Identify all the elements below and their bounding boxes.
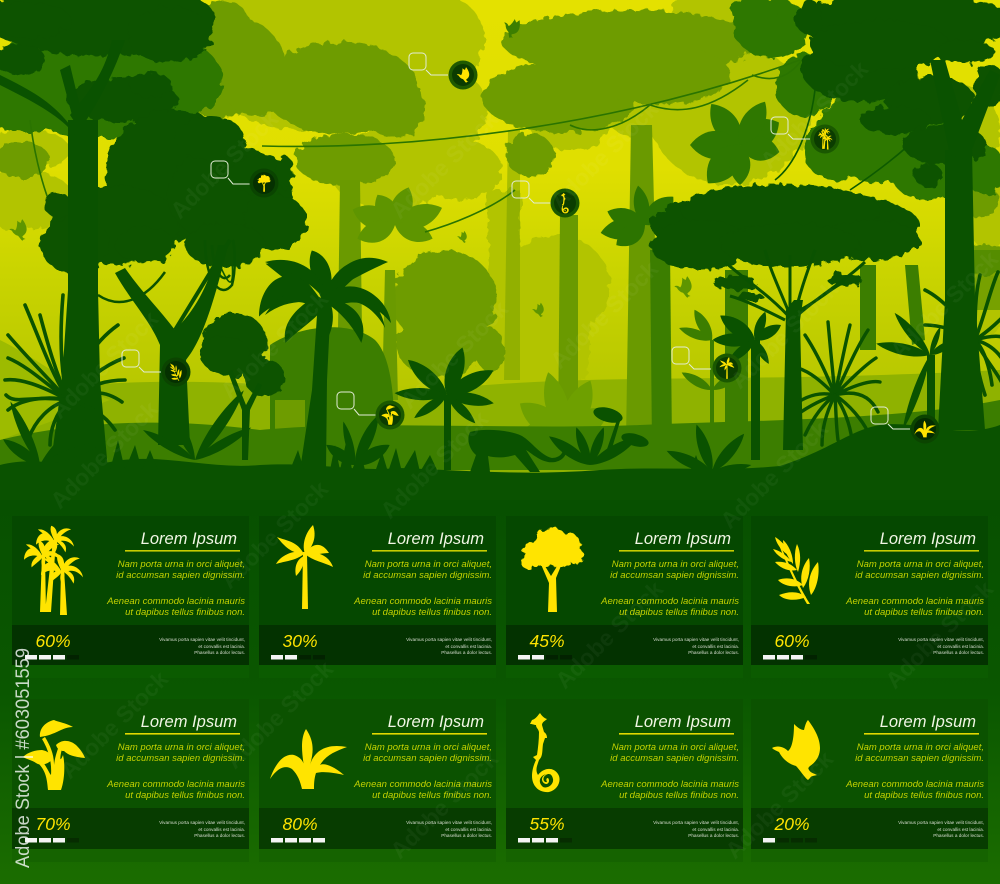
panel: vine 55%: id accumsan sapien dignissim.: [610, 753, 739, 764]
panel: vine 55%: Phasellus a dolor lectus.: [688, 833, 739, 838]
panel: fern 80%: Aenean commodo lacinia mauris: [353, 779, 492, 790]
panel: bird 20%: 20%: [773, 814, 810, 834]
leaf plant behind palm: [678, 307, 745, 440]
panel: fern 80%: 80%: [282, 814, 318, 834]
panel: bird 20%: Phasellus a dolor lectus.: [933, 833, 984, 838]
panel: vine 55%: Aenean commodo lacinia mauris: [600, 779, 739, 790]
panel: frond 60%: Phasellus a dolor lectus.: [933, 650, 984, 655]
panel: fern 80%: et convallis est lacinia.: [445, 827, 492, 832]
callout: mushroom plant: [337, 392, 404, 430]
watermark pattern: Adobe Stock: [215, 476, 333, 594]
watermark pattern: Adobe Stock: [720, 746, 838, 864]
panel: vine 55%: [506, 699, 743, 862]
watermark pattern: Adobe Stock: [880, 576, 998, 694]
panel: palms 60%: [12, 516, 249, 678]
left ground leaves: [0, 400, 107, 470]
panel: vine 55%: ut dapibus tellus finibus non.: [619, 790, 739, 801]
watermark pattern: Adobe Stock: [385, 746, 503, 864]
panel: plant 70%: et convallis est lacinia.: [198, 827, 245, 832]
watermark pattern: Adobe Stock: [385, 106, 503, 224]
small tree: [200, 313, 285, 460]
panel: plant 70%: Aenean commodo lacinia mauris: [106, 779, 245, 790]
panel: frond 60%: Aenean commodo lacinia mauris: [845, 596, 984, 607]
front tree right: [795, 0, 1000, 430]
small palm right: [712, 309, 784, 460]
watermark pattern: Adobe Stock: [545, 256, 663, 374]
watermark pattern: Adobe Stock: [395, 296, 513, 414]
watermark pattern: Adobe Stock: [885, 246, 1000, 364]
background palm: [349, 184, 446, 248]
callout: frond: [122, 350, 190, 386]
panel: plant 70%: 70%: [35, 814, 71, 834]
panel: frond 60%: ut dapibus tellus finibus non.: [864, 607, 984, 618]
panel: frond 60%: Vivamus porta sapien vitae velit tincidunt,: [898, 637, 984, 642]
lower haze band: [0, 370, 1000, 480]
panel: fern 80%: Nam porta urna in orci aliquet,: [365, 742, 492, 753]
panel: vine 55%: et convallis est lacinia.: [692, 827, 739, 832]
background canopy layer: pale: [0, 0, 1000, 420]
panel: palms 60%: Aenean commodo lacinia mauris: [106, 596, 245, 607]
panel: palms 60%: et convallis est lacinia.: [198, 644, 245, 649]
right palm and banana: [875, 310, 958, 435]
fan palm edge: [925, 272, 1000, 395]
panel: plant 70%: [12, 699, 249, 862]
callout: vine: [512, 181, 580, 218]
panel: frond 60%: et convallis est lacinia.: [937, 644, 984, 649]
panel: bird 20%: Nam porta urna in orci aliquet,: [857, 742, 984, 753]
plant near leopard: [546, 404, 650, 470]
panel: tree 45%: Aenean commodo lacinia mauris: [600, 596, 739, 607]
panel: bird 20%: id accumsan sapien dignissim.: [855, 753, 984, 764]
panel: tree 45%: Nam porta urna in orci aliquet,: [612, 559, 739, 570]
watermark pattern: Adobe Stock: [725, 276, 843, 394]
callout: fern: [871, 407, 940, 444]
panel: plant 70%: Phasellus a dolor lectus.: [194, 833, 245, 838]
watermark pattern: Adobe Stock: [755, 56, 873, 174]
dark mid canopy layer: [0, 0, 1000, 200]
panel: tree 45%: Lorem Ipsum: [635, 530, 731, 548]
panel: bird 20%: ut dapibus tellus finibus non.: [864, 790, 984, 801]
panel: frond 60%: 60%: [774, 631, 810, 651]
panel: palms 60%: Lorem Ipsum: [141, 530, 237, 548]
panel: tree 45%: id accumsan sapien dignissim.: [610, 570, 739, 581]
callout: palms: [771, 117, 840, 154]
panel: fern 80%: Vivamus porta sapien vitae velit tincidunt,: [406, 820, 492, 825]
panel: plant 70%: Lorem Ipsum: [141, 713, 237, 731]
panel: banana 30%: [259, 516, 496, 678]
panel: plant 70%: Vivamus porta sapien vitae velit tincidunt,: [159, 820, 245, 825]
panel: fern 80%: Lorem Ipsum: [388, 713, 484, 731]
panel: banana 30%: Aenean commodo lacinia mauris: [353, 596, 492, 607]
panel: tree 45%: [506, 516, 743, 678]
panel: vine 55%: Nam porta urna in orci aliquet,: [612, 742, 739, 753]
panel: fern 80%: ut dapibus tellus finibus non.: [372, 790, 492, 801]
watermark pattern: Adobe Stock: [45, 396, 163, 514]
fan palm left: [5, 295, 125, 445]
background big leaf plant: [690, 96, 786, 192]
panel: fern 80%: Phasellus a dolor lectus.: [441, 833, 492, 838]
panel: tree 45%: 45%: [529, 631, 565, 651]
front palm center: [259, 250, 391, 470]
panel: banana 30%: 30%: [282, 631, 318, 651]
watermark pattern: Adobe Stock: [55, 666, 173, 784]
panel: frond 60%: Lorem Ipsum: [880, 530, 976, 548]
lower background: [0, 500, 1000, 884]
panel: vine 55%: 55%: [529, 814, 565, 834]
hanging vines: [30, 55, 805, 232]
panel: plant 70%: ut dapibus tellus finibus non.: [125, 790, 245, 801]
panel: bird 20%: [751, 699, 988, 862]
watermark pattern: Adobe Stock: [375, 406, 493, 524]
panel: tree 45%: et convallis est lacinia.: [692, 644, 739, 649]
watermark pattern: Adobe Stock: [215, 286, 333, 404]
panel: palms 60%: ut dapibus tellus finibus non.: [125, 607, 245, 618]
panel: banana 30%: Phasellus a dolor lectus.: [441, 650, 492, 655]
panel: plant 70%: Nam porta urna in orci aliquet,: [118, 742, 245, 753]
panel: frond 60%: [751, 516, 988, 678]
panel: fern 80%: [259, 699, 496, 862]
panel: fern 80%: id accumsan sapien dignissim.: [363, 753, 492, 764]
leopard: [468, 430, 566, 472]
watermark pattern: Adobe Stock: [545, 96, 663, 214]
panel: frond 60%: Nam porta urna in orci aliquet,: [857, 559, 984, 570]
jungle scene: [0, 0, 1000, 520]
panel: bird 20%: Vivamus porta sapien vitae velit tincidunt,: [898, 820, 984, 825]
panel: tree 45%: Phasellus a dolor lectus.: [688, 650, 739, 655]
panel: tree 45%: ut dapibus tellus finibus non.: [619, 607, 739, 618]
panel: palms 60%: 60%: [35, 631, 71, 651]
watermark pattern: Adobe Stock: [165, 106, 283, 224]
panel: palms 60%: id accumsan sapien dignissim.: [116, 570, 245, 581]
watermark pattern: Adobe Stock: [715, 416, 833, 534]
panel: banana 30%: Lorem Ipsum: [388, 530, 484, 548]
callout: tree: [211, 161, 278, 198]
panel: vine 55%: Lorem Ipsum: [635, 713, 731, 731]
umbrella tree: [650, 184, 920, 450]
panel: bird 20%: Lorem Ipsum: [880, 713, 976, 731]
front tree left: [0, 0, 307, 470]
panel: plant 70%: id accumsan sapien dignissim.: [116, 753, 245, 764]
watermark pattern: Adobe Stock: [45, 306, 163, 424]
callout: bird: [409, 53, 478, 90]
panel: bird 20%: et convallis est lacinia.: [937, 827, 984, 832]
panel: bird 20%: Aenean commodo lacinia mauris: [845, 779, 984, 790]
vertical stock id: Adobe Stock | #603051559: [12, 648, 34, 868]
panel: vine 55%: Vivamus porta sapien vitae velit tincidunt,: [653, 820, 739, 825]
panel: banana 30%: et convallis est lacinia.: [445, 644, 492, 649]
panel: banana 30%: Nam porta urna in orci aliquet,: [365, 559, 492, 570]
panel: banana 30%: id accumsan sapien dignissim.: [363, 570, 492, 581]
fan palm right: [790, 322, 880, 445]
panel: banana 30%: ut dapibus tellus finibus non.: [372, 607, 492, 618]
panel: tree 45%: Vivamus porta sapien vitae velit tincidunt,: [653, 637, 739, 642]
mid canopy layer: [0, 1, 1000, 377]
background leafy plant: [513, 369, 614, 446]
panel: palms 60%: Phasellus a dolor lectus.: [194, 650, 245, 655]
panel: palms 60%: Vivamus porta sapien vitae velit tincidunt,: [159, 637, 245, 642]
watermark pattern: Adobe Stock: [220, 656, 338, 774]
ground: [0, 424, 1000, 520]
banana plant: [394, 345, 497, 470]
panel: palms 60%: Nam porta urna in orci aliquet,: [118, 559, 245, 570]
background palm: dark: [599, 184, 681, 253]
panel: banana 30%: Vivamus porta sapien vitae velit tincidunt,: [406, 637, 492, 642]
callout: banana: [672, 347, 742, 382]
panel: frond 60%: id accumsan sapien dignissim.: [855, 570, 984, 581]
watermark pattern: Adobe Stock: [550, 576, 668, 694]
small birds: [9, 14, 692, 317]
